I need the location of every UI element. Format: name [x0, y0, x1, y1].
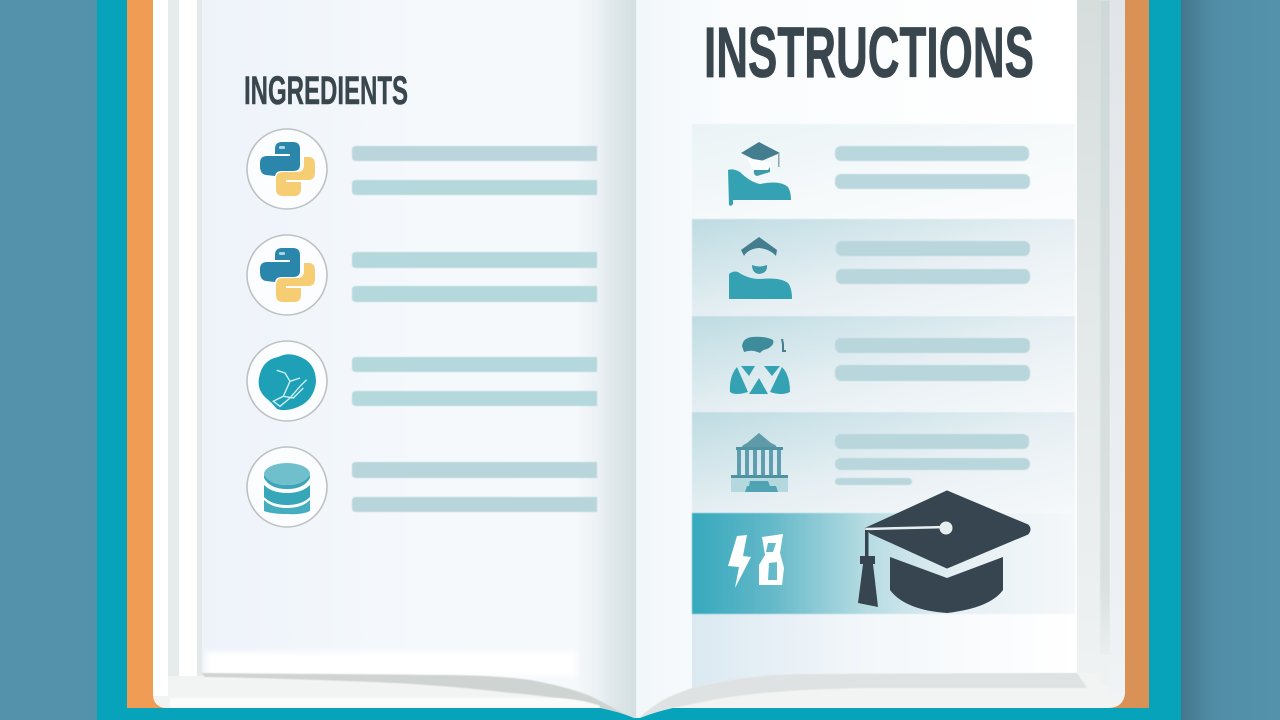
heading: ingredients: INGREDIENTS: [244, 69, 408, 113]
ingredient row 1: [247, 129, 597, 209]
instruction band 1: [692, 124, 1075, 219]
instruction band 2: [692, 219, 1075, 316]
page stack: [153, 0, 1125, 718]
icon: graduate with cap: [728, 142, 791, 206]
instruction band 4: [692, 412, 1075, 513]
text placeholder bars: [352, 462, 597, 512]
icon: graduation cap: [858, 491, 1030, 613]
page bottom curves: [170, 673, 1087, 718]
text placeholder bars: [836, 241, 1030, 284]
text placeholder bars: [835, 146, 1030, 189]
text placeholder bars: [352, 146, 597, 195]
instruction band 5: highlighted: [692, 513, 1075, 614]
tassel: [858, 556, 878, 607]
icon: python logo: [247, 235, 327, 315]
icon: python logo: [247, 129, 327, 209]
right page: [637, 0, 1077, 718]
ingredient row 3: [247, 341, 597, 421]
cap base: [890, 557, 1003, 613]
icon: lightning and eight glyph: [728, 534, 784, 588]
right page lower tint: [692, 614, 1076, 688]
text placeholder bars: [352, 252, 597, 302]
text placeholder bars: [835, 338, 1030, 381]
instruction band 3: [692, 316, 1075, 412]
ingredient row 4: [247, 447, 597, 527]
tassel cord: [866, 527, 947, 529]
icon: graduate bust: [729, 237, 792, 299]
icon: teal globe with network: [247, 341, 327, 421]
icon: institution building: [731, 433, 788, 492]
text placeholder bars: [352, 357, 597, 406]
icon: database: [247, 447, 327, 527]
orange page block: [127, 0, 1149, 708]
left page bright lower area: [206, 652, 576, 676]
text placeholder bars: [835, 434, 1030, 485]
icon: student in jacket: [730, 337, 790, 394]
heading: instructions: INSTRUCTIONS: [704, 14, 1034, 93]
bottom cover strip: [97, 708, 1181, 720]
cap board: [866, 491, 1030, 568]
ingredient row 2: [247, 235, 597, 315]
left page: [202, 0, 636, 718]
